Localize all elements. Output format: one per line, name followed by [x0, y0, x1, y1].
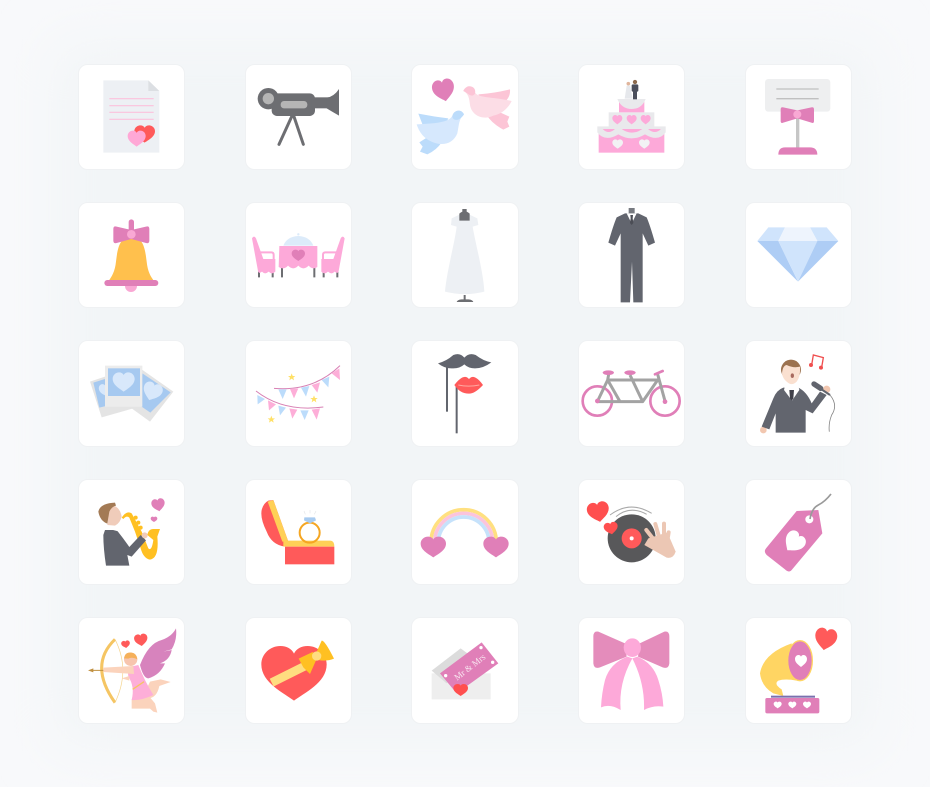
- icon card: wedding cake: [578, 64, 684, 170]
- icon card: pink bow: [578, 618, 684, 724]
- icon card: wedding dress: [412, 202, 518, 308]
- icon card: saxophone player: [78, 480, 184, 584]
- icon card: diamond: [746, 202, 852, 308]
- icon card: dinner table: [246, 202, 352, 308]
- icon card: invitation envelope: [412, 618, 518, 724]
- icon card: vinyl record: [578, 480, 684, 584]
- icon card: rainbow: [412, 480, 518, 584]
- icon card: heart with ribbon: [246, 618, 352, 724]
- icon card: gramophone: [746, 618, 852, 724]
- icon card: ring box: [246, 480, 352, 584]
- icon card: tandem bicycle: [578, 340, 684, 446]
- invitation text: Mr & Mrs: [452, 651, 488, 682]
- icon card: place card: [746, 64, 852, 170]
- icon card: gift tag: [746, 480, 852, 584]
- icon card: mustache and lips props: [412, 340, 518, 446]
- icon card: cupid: [78, 618, 184, 724]
- icon card: photos: [78, 340, 184, 446]
- icon card: groom suit: [578, 202, 684, 308]
- icon card: wedding letter: [78, 64, 184, 170]
- icon card: love doves: [412, 64, 518, 170]
- icon card: singer: [746, 340, 852, 446]
- icon card: bunting: [246, 340, 352, 446]
- icon card: wedding bell: [78, 202, 184, 308]
- icon card: video camera: [246, 64, 352, 170]
